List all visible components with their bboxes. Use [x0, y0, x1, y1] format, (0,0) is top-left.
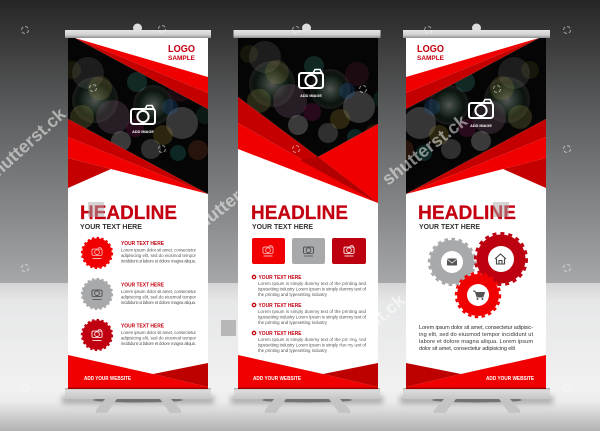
banner 2 camera icon: ADD IMAGE: [300, 94, 322, 98]
banner 2 panel: [238, 38, 378, 389]
list item 1: typesetting industry Lorem Ipsum is simply dummy text of: [258, 286, 367, 292]
banner 1 top bar: [65, 24, 211, 38]
banner 3 panel: [406, 38, 546, 389]
list item 3: YOUR TEXT HERE: [258, 331, 302, 337]
list item 1: [252, 275, 367, 297]
banner 1: [62, 24, 214, 413]
banner 1 stand feet: [62, 396, 214, 413]
banner 3 footer shape: [406, 355, 546, 389]
list item 2: Lorem Ipsum is simply dummy text of the printing and: [258, 309, 367, 314]
feature 2 text: YOUR TEXT HERE: [121, 282, 165, 288]
feature 2 text: adipisicing elit, sed do eiusmod tempor: [121, 294, 197, 299]
list item 1: Lorem Ipsum is simply dummy text of the printing and: [258, 281, 367, 286]
feature 3 text: adipisicing elit, sed do eiusmod tempor: [121, 336, 197, 341]
banner 3 top bar: [403, 24, 550, 38]
list item 3: Lorem Ipsum is simply dummy text of the printing and: [258, 337, 367, 342]
list item 2: YOUR TEXT HERE: [258, 303, 302, 309]
banner 2 subheading: YOUR TEXT HERE: [252, 222, 313, 231]
banner 3 logo: SAMPLE: [417, 55, 445, 62]
feature 3 text: Lorem ipsum dolor sit amet, consectetur: [121, 330, 197, 335]
list item 1: the printing and typesetting industry: [258, 292, 328, 297]
list item 3: typesetting industry Lorem Ipsum is simply dummy text of: [258, 342, 367, 348]
feature 1 text: [121, 241, 197, 264]
banner 2 photo area: [238, 38, 391, 158]
banner 3 top red stripes: [406, 38, 539, 109]
banner 3 website: ADD YOUR WEBSITE: [486, 376, 535, 382]
gear badge: red: [82, 238, 112, 268]
banner 1 camera icon: ADD IMAGE: [132, 130, 154, 134]
banner 1 base: [65, 388, 211, 399]
banner 3 paragraph: Lorem ipsum dolor sit amet, consectetur adipisic-: [419, 325, 533, 331]
banner 3 paragraph: dolor sit amet, consectetur adipisicing elit: [419, 346, 515, 352]
banner 1 logo: LOGO: [168, 44, 195, 55]
feature 2 text: incididunt ut labore et dolore magna aliqua.: [121, 300, 196, 305]
watermarks: shutterst.ck: [318, 290, 409, 371]
banner 1 headline: HEADLINE: [80, 202, 177, 224]
list item 1: YOUR TEXT HERE: [258, 275, 302, 281]
gear: dark red with house: [475, 233, 527, 285]
banner 3 photo area: [406, 38, 546, 194]
gear: red with cart: [456, 273, 500, 317]
list item 2: the printing and typesetting industry: [258, 320, 328, 325]
banner 2 stand feet: [231, 396, 383, 413]
feature 1 text: YOUR TEXT HERE: [121, 241, 165, 247]
feature 2 text: Lorem ipsum dolor sit amet, consectetur: [121, 289, 197, 294]
banner 3 camera icon: [469, 100, 493, 128]
feature 1 text: incididunt ut labore et dolore magna aliqua.: [121, 258, 196, 264]
banner 3 paragraph: [419, 325, 533, 352]
banner 1 photo area: [63, 38, 214, 194]
banner 1 subheading: YOUR TEXT HERE: [80, 222, 142, 231]
banner 3 lower red stripes: [406, 119, 546, 194]
banner 2 top bar: [234, 24, 380, 38]
banner 1 top red stripes: [75, 38, 208, 109]
list item 2: typesetting industry Lorem Ipsum is simply dummy text of: [258, 314, 367, 320]
banner 3 stand feet: [400, 396, 553, 413]
banner 1 lower red stripes: [68, 119, 208, 194]
banner 1 camera icon: [131, 106, 155, 134]
banner 3 subheading: YOUR TEXT HERE: [419, 222, 480, 231]
gear: gray with envelope: [429, 239, 475, 285]
list item 3: [252, 331, 367, 353]
banner 1 panel: [68, 38, 208, 389]
feature 2 text: [121, 282, 197, 305]
banner 2 footer shape: [238, 355, 378, 389]
banner 1 logo: [168, 44, 196, 62]
banner 3 paragraph: ing elit, sed do eiusmod tempor incididunt ut: [419, 332, 533, 338]
tile: gray: [292, 238, 325, 264]
feature 3 text: incididunt ut labore et dolore magna aliqua.: [121, 341, 196, 346]
banner 3 logo: LOGO: [417, 44, 444, 55]
background wall: [0, 0, 600, 283]
banner 2: [231, 24, 391, 413]
feature 1 text: Lorem ipsum dolor sit amet, consectetur: [121, 248, 197, 252]
watermarks: shutterst.ck: [378, 110, 472, 189]
banner 3 logo: [417, 44, 445, 62]
banner 2 base: [234, 388, 380, 399]
list item 3: the printing and typesetting industry: [258, 348, 328, 353]
banner 3 base: [403, 388, 550, 399]
banner 3 camera icon: ADD IMAGE: [470, 124, 492, 128]
gear badge: dark red: [82, 320, 112, 350]
banner 1 website: ADD YOUR WEBSITE: [84, 376, 132, 382]
banner 3 paragraph: labore et dolore magna aliqua. Lorem ipsum: [419, 339, 533, 345]
tile: dark red: [332, 238, 366, 264]
banner 3 headline: HEADLINE: [418, 202, 516, 224]
banner 2 headline: HEADLINE: [251, 202, 348, 224]
feature 3 text: YOUR TEXT HERE: [121, 324, 165, 330]
banner 3: [388, 24, 553, 413]
banner 2 website: ADD YOUR WEBSITE: [253, 376, 302, 382]
background floor: [0, 283, 600, 431]
list item 2: [252, 303, 367, 325]
banner 1 logo: SAMPLE: [168, 55, 196, 62]
banner 1 footer shape: [68, 355, 208, 389]
feature 3 text: [121, 324, 197, 346]
watermarks: shutterst.ck: [185, 160, 279, 239]
gear badge: gray: [82, 279, 112, 309]
banner 2 camera icon: [299, 70, 323, 98]
tile: red: [252, 238, 285, 264]
feature 1 text: adipisicing elit, sed do eiusmod tempor: [121, 253, 197, 258]
banner 2 red chevron: [238, 97, 378, 203]
